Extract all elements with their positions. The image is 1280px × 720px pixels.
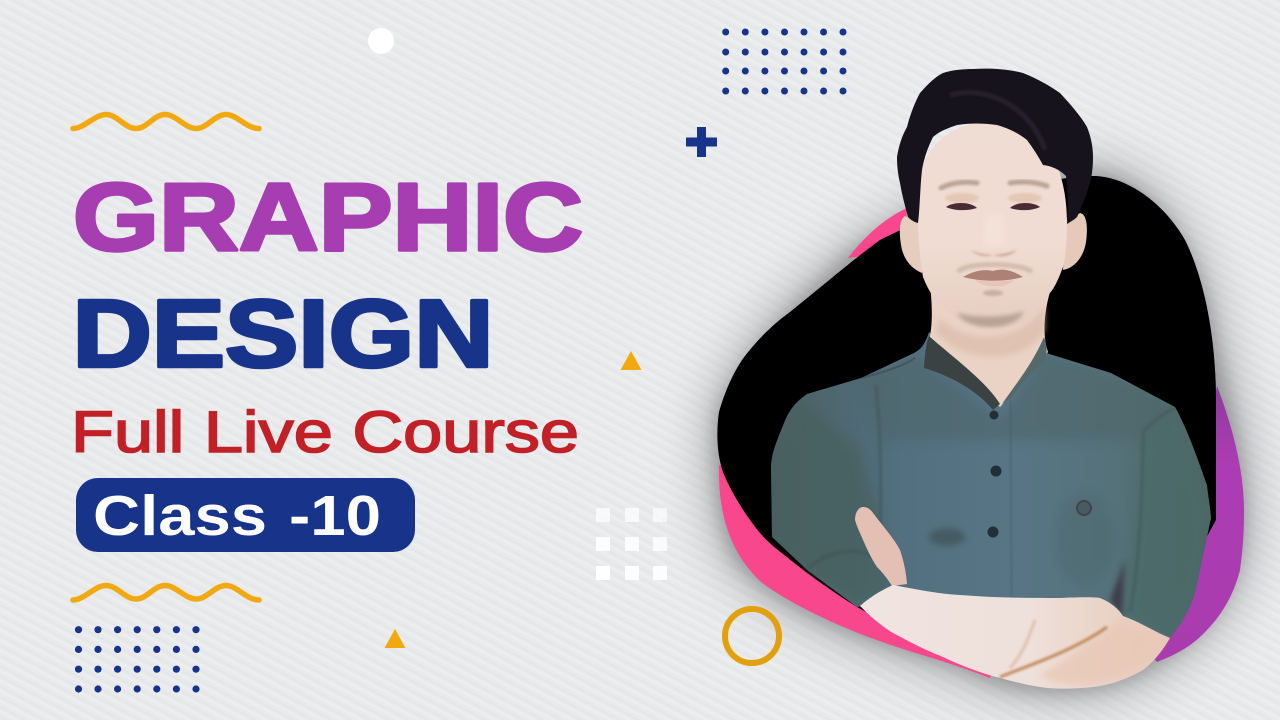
title: GRAPHIC: GRAPHIC (73, 164, 583, 271)
hair highlight (950, 92, 1045, 150)
ear right (1063, 213, 1087, 270)
class badge: -10 (289, 484, 381, 548)
class badge (76, 478, 415, 552)
orange ring (725, 609, 779, 663)
triangle middle (620, 351, 642, 370)
shirt buttons (988, 410, 1002, 538)
eyelid shading (945, 193, 1042, 203)
neck shadow (935, 305, 1045, 357)
shirt pocket logo (1077, 501, 1091, 515)
moustache shadow (958, 264, 1032, 272)
shirt shading (772, 353, 1210, 638)
forearm shading (1040, 620, 1165, 685)
blob: purple (1120, 386, 1244, 662)
eyes (946, 203, 1040, 210)
wave top (73, 114, 259, 128)
dot grid top right (722, 28, 846, 94)
wave bottom (73, 586, 259, 600)
white circle (368, 28, 394, 54)
arm crease (1000, 627, 1107, 677)
nose (970, 215, 1017, 256)
neck (929, 285, 1052, 407)
soft shadow behind portrait (704, 160, 1257, 703)
face (918, 122, 1067, 327)
lip shadow (983, 290, 1003, 296)
eyebrows (941, 182, 1047, 188)
subtitle: Full Live Course (71, 400, 579, 465)
blob: pink (719, 208, 1000, 678)
hair (897, 69, 1093, 224)
man (771, 69, 1211, 689)
white square grid (596, 508, 667, 580)
class badge: Class (93, 484, 267, 548)
hand (855, 507, 907, 586)
forearms (860, 585, 1170, 689)
goatee (957, 311, 1024, 327)
title: DESIGN: DESIGN (72, 280, 494, 388)
blob: black (717, 176, 1216, 650)
plus icon (686, 127, 717, 157)
shirt (771, 332, 1211, 638)
mouth (963, 270, 1023, 286)
collar (924, 336, 1047, 410)
dot grid bottom left (75, 626, 200, 693)
ear left (900, 216, 922, 273)
triangle bottom (384, 629, 406, 648)
